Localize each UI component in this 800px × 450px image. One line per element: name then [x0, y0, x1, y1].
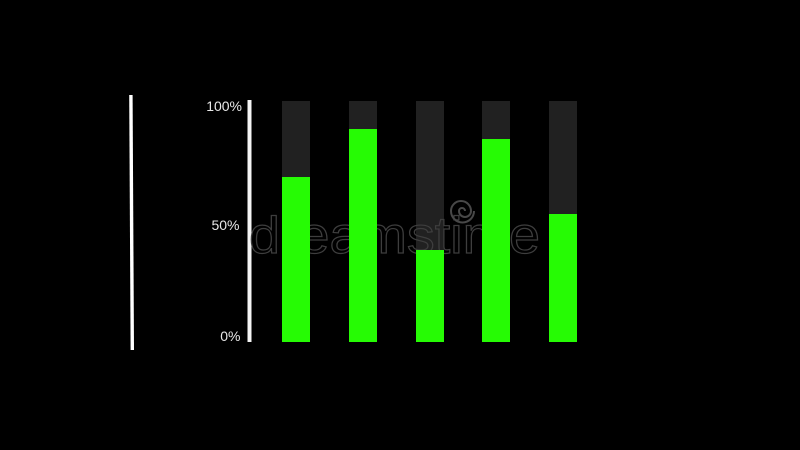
bar 3: 40%	[416, 250, 444, 342]
y axis labels	[206, 98, 242, 344]
bar 2: 90%	[349, 129, 377, 342]
y axis labels: 0%	[220, 328, 240, 344]
bar tracks	[282, 101, 577, 342]
y axis labels: 50%	[211, 217, 240, 233]
y axis line	[248, 100, 252, 342]
bar 4: 85%	[482, 139, 510, 342]
left vertical line	[129, 95, 134, 350]
bar 5: 55%	[549, 214, 577, 342]
watermark: dreamstime	[249, 207, 540, 265]
bar 1: 70%	[282, 177, 310, 342]
y axis labels: 100%	[206, 98, 242, 114]
